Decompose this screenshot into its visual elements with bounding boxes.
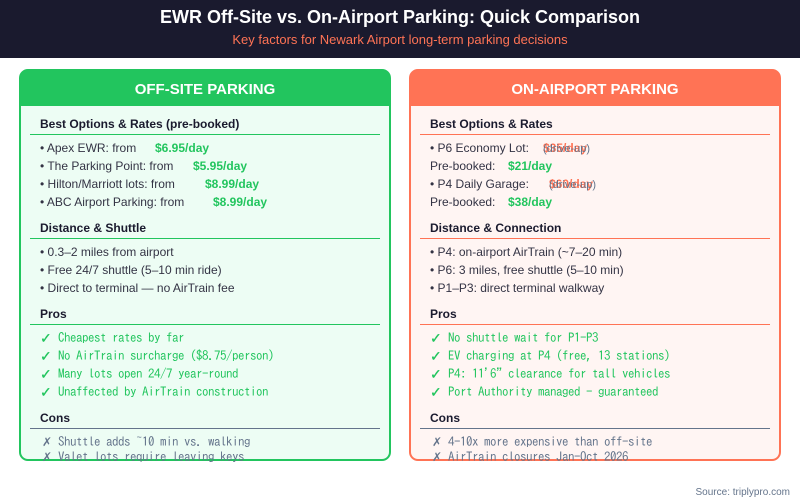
section: pros: Cheapest rates by far xyxy=(58,331,184,344)
section: cons: ✗ xyxy=(432,435,442,449)
section: best options and rates: $8.99/day xyxy=(205,177,259,191)
section: pros: ✓ xyxy=(40,331,52,347)
section: best options and rates: • Hilton/Marriott lots: from xyxy=(40,177,175,191)
section: distance and connection xyxy=(420,221,770,295)
section: cons: AirTrain closures Jan-Oct 2026 xyxy=(448,450,628,463)
section: pros: Unaffected by AirTrain construction xyxy=(58,385,268,398)
section: best options and rates: $60/day xyxy=(549,177,593,191)
section: best options and rates: Best Options & Rates (pre-booked) xyxy=(40,117,239,131)
section: distance and connection: • P6: 3 miles, free shuttle (5–10 min) xyxy=(430,263,624,277)
section: distance and shuttle: • Free 24/7 shuttle (5–10 min ride) xyxy=(40,263,222,277)
section: distance and shuttle xyxy=(30,221,380,295)
section: distance and connection: Distance & Connection xyxy=(430,221,561,235)
section: pros: No AirTrain surcharge ($8.75/person) xyxy=(58,349,274,362)
section: cons: 4-10x more expensive than off-site xyxy=(448,435,652,448)
section: best options and rates: (drive-up) xyxy=(549,179,596,191)
section: cons: Cons xyxy=(40,411,70,425)
section: pros: Many lots open 24/7 year-round xyxy=(58,367,238,380)
section: cons: ✗ xyxy=(42,435,52,449)
section: pros xyxy=(420,307,770,401)
section: best options and rates xyxy=(30,117,380,209)
panel: off-site parking xyxy=(20,70,390,464)
section: cons: Cons xyxy=(430,411,460,425)
section: cons xyxy=(420,411,770,464)
section: distance and shuttle: • Direct to terminal — no AirTrain fee xyxy=(40,281,235,295)
section: best options and rates: Pre-booked: xyxy=(430,195,495,209)
section: best options and rates: Pre-booked: xyxy=(430,159,495,173)
section: best options and rates: Best Options & Rates xyxy=(430,117,553,131)
section: best options and rates: • Apex EWR: from xyxy=(40,141,136,155)
section: best options and rates: (drive-up) xyxy=(543,143,590,155)
section: best options and rates: $8.99/day xyxy=(213,195,267,209)
section: pros: EV charging at P4 (free, 13 stations) xyxy=(448,349,670,362)
panel: on-airport parking xyxy=(410,70,780,464)
section: best options and rates: • P6 Economy Lot: xyxy=(430,141,529,155)
section: cons: Valet lots require leaving keys xyxy=(58,450,244,463)
section: pros: ✓ xyxy=(430,331,442,347)
section: cons xyxy=(30,411,380,464)
section: pros: Pros xyxy=(40,307,67,321)
section: cons: Shuttle adds ~10 min vs. walking xyxy=(58,435,250,448)
section: pros: Pros xyxy=(430,307,457,321)
section: pros: ✓ xyxy=(40,349,52,365)
section: pros: ✓ xyxy=(430,367,442,383)
section: best options and rates: • P4 Daily Garage: xyxy=(430,177,529,191)
section: best options and rates: $35/day xyxy=(543,141,587,155)
section: pros: ✓ xyxy=(40,385,52,401)
section: distance and connection: • P1–P3: direct terminal walkway xyxy=(430,281,604,295)
panel heading: off-site: OFF-SITE PARKING xyxy=(135,81,275,98)
section: best options and rates: $38/day xyxy=(508,195,552,209)
section: best options and rates: • The Parking Point: from xyxy=(40,159,173,173)
section: pros: Port Authority managed - guaranteed xyxy=(448,385,658,398)
section: best options and rates xyxy=(420,117,770,209)
section: pros: P4: 11'6" clearance for tall vehicles xyxy=(448,367,670,380)
section: pros: ✓ xyxy=(430,385,442,401)
section: distance and connection: • P4: on-airport AirTrain (~7–20 min) xyxy=(430,245,622,259)
source note: Source: triplypro.com xyxy=(696,487,790,498)
header band xyxy=(0,0,800,58)
section: best options and rates: $21/day xyxy=(508,159,552,173)
section: cons: ✗ xyxy=(432,450,442,464)
section: best options and rates: $6.95/day xyxy=(155,141,209,155)
section: pros: ✓ xyxy=(40,367,52,383)
section: best options and rates: • ABC Airport Parking: from xyxy=(40,195,184,209)
section: pros xyxy=(30,307,380,401)
section: pros: ✓ xyxy=(430,349,442,365)
section: distance and shuttle: • 0.3–2 miles from airport xyxy=(40,245,174,259)
section: pros: No shuttle wait for P1-P3 xyxy=(448,331,598,344)
section: distance and shuttle: Distance & Shuttle xyxy=(40,221,146,235)
subtitle: Key factors for Newark Airport long-term parking decisions xyxy=(232,32,568,47)
section: cons: ✗ xyxy=(42,450,52,464)
section: best options and rates: $5.95/day xyxy=(193,159,247,173)
panel heading: on-airport: ON-AIRPORT PARKING xyxy=(511,81,679,98)
title: EWR Off-Site vs. On-Airport Parking: Quick Comparison xyxy=(160,7,640,27)
